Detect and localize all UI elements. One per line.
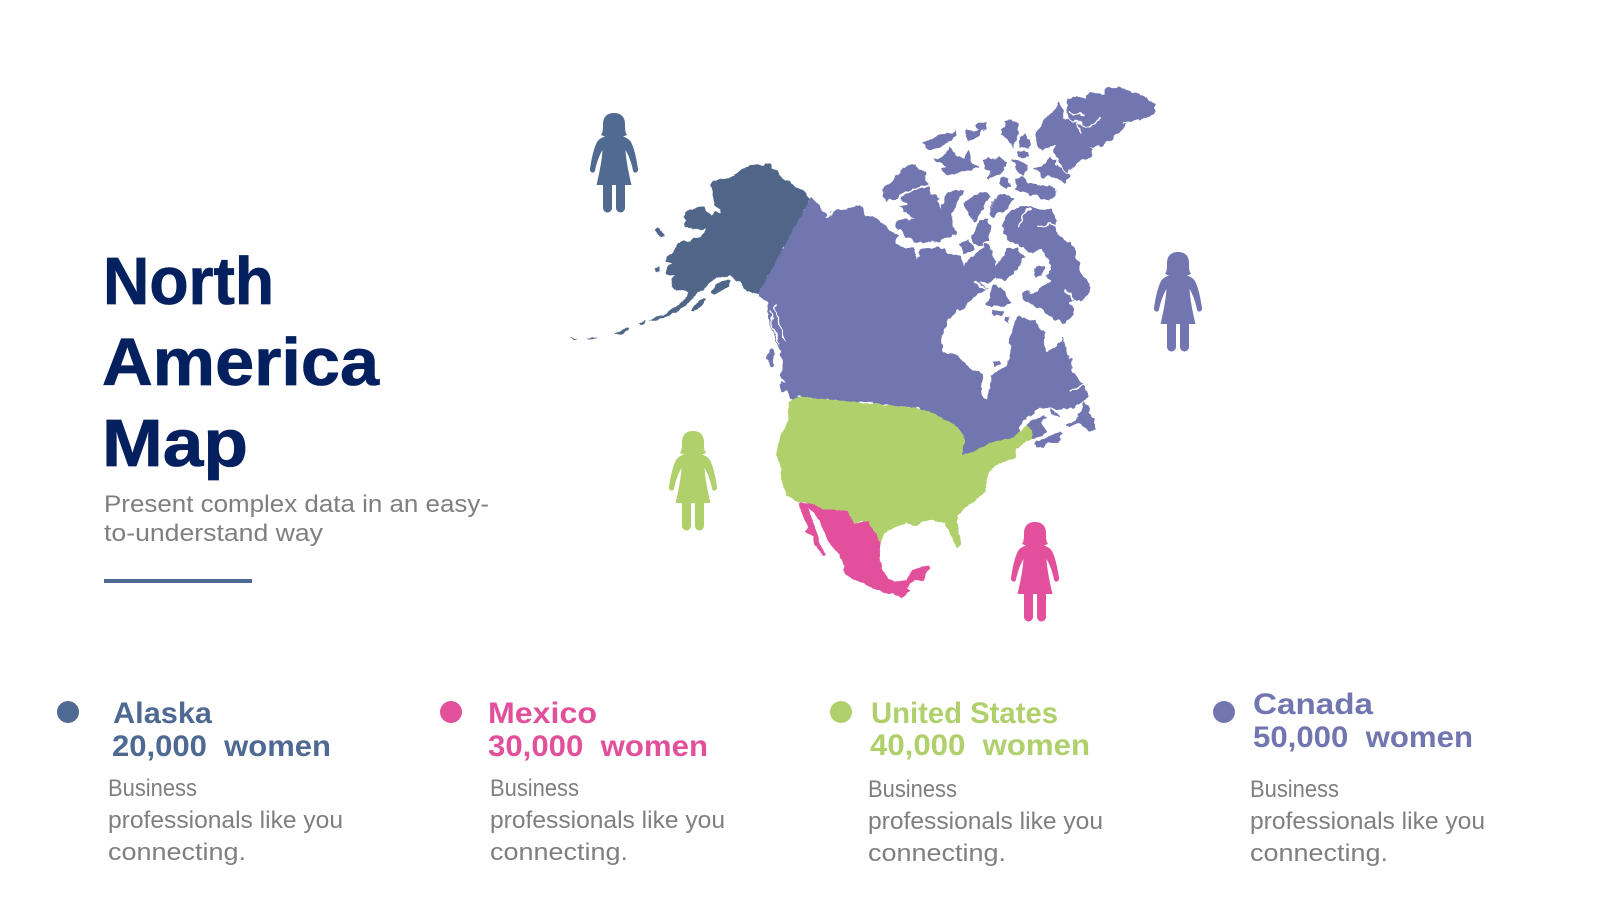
legend: Alaska bbox=[57, 697, 343, 866]
legend text: Business bbox=[1250, 776, 1339, 803]
region: Mexico bbox=[798, 503, 930, 598]
legend heading: 20,000 women bbox=[112, 730, 331, 763]
subtitle: to-understand way bbox=[104, 520, 323, 547]
legend heading bbox=[488, 697, 708, 763]
map of North America bbox=[570, 88, 1155, 598]
subtitle: Present complex data in an easy- bbox=[104, 491, 489, 518]
legend text bbox=[868, 776, 1103, 867]
legend text: professionals like you bbox=[490, 807, 725, 834]
legend text: connecting. bbox=[868, 840, 1006, 867]
region: Alaska bbox=[570, 163, 810, 340]
legend text: Business bbox=[108, 775, 197, 802]
water: fjords and channels bbox=[767, 112, 1138, 389]
legend text: professionals like you bbox=[1250, 808, 1485, 835]
legend text bbox=[490, 775, 725, 866]
legend text: Business bbox=[490, 775, 579, 802]
legend text: connecting. bbox=[1250, 840, 1388, 867]
legend heading bbox=[112, 697, 331, 763]
legend dot bbox=[1213, 701, 1235, 723]
title: North bbox=[103, 244, 274, 319]
legend text bbox=[1250, 776, 1485, 867]
title: Map bbox=[102, 406, 248, 481]
Nova Scotia bbox=[1035, 432, 1063, 448]
Anticosti bbox=[1050, 411, 1059, 416]
legend heading: Alaska bbox=[113, 697, 212, 730]
legend heading: Canada bbox=[1253, 688, 1373, 721]
legend heading: 40,000 women bbox=[870, 729, 1090, 762]
legend: Canada bbox=[1213, 688, 1485, 867]
legend text: connecting. bbox=[490, 839, 628, 866]
region: United States bbox=[777, 397, 1032, 548]
icon: woman Canada bbox=[1154, 252, 1202, 352]
title bbox=[102, 244, 380, 481]
legend text: professionals like you bbox=[108, 807, 343, 834]
legend text bbox=[108, 775, 343, 866]
region: Canada bbox=[758, 88, 1155, 455]
Newfoundland bbox=[1068, 402, 1097, 430]
legend: Mexico bbox=[440, 697, 725, 866]
legend heading: United States bbox=[871, 697, 1058, 730]
legend heading: Mexico bbox=[488, 697, 597, 730]
title: America bbox=[102, 325, 380, 400]
legend heading bbox=[870, 697, 1090, 762]
legend heading: 50,000 women bbox=[1253, 721, 1473, 754]
legend dot bbox=[440, 701, 462, 723]
icon: woman United States bbox=[669, 431, 717, 530]
legend heading bbox=[1253, 688, 1473, 754]
icon: woman Alaska bbox=[590, 113, 638, 212]
legend: United States bbox=[830, 697, 1103, 867]
accent line under subtitle bbox=[104, 579, 252, 583]
icon: woman Mexico bbox=[1011, 522, 1059, 622]
New Brunswick bbox=[1027, 416, 1047, 439]
legend text: professionals like you bbox=[868, 808, 1103, 835]
legend dot bbox=[57, 701, 79, 723]
subtitle bbox=[104, 491, 489, 547]
legend text: Business bbox=[868, 776, 957, 803]
legend heading: 30,000 women bbox=[488, 730, 708, 763]
legend text: connecting. bbox=[108, 839, 246, 866]
legend dot bbox=[830, 701, 852, 723]
